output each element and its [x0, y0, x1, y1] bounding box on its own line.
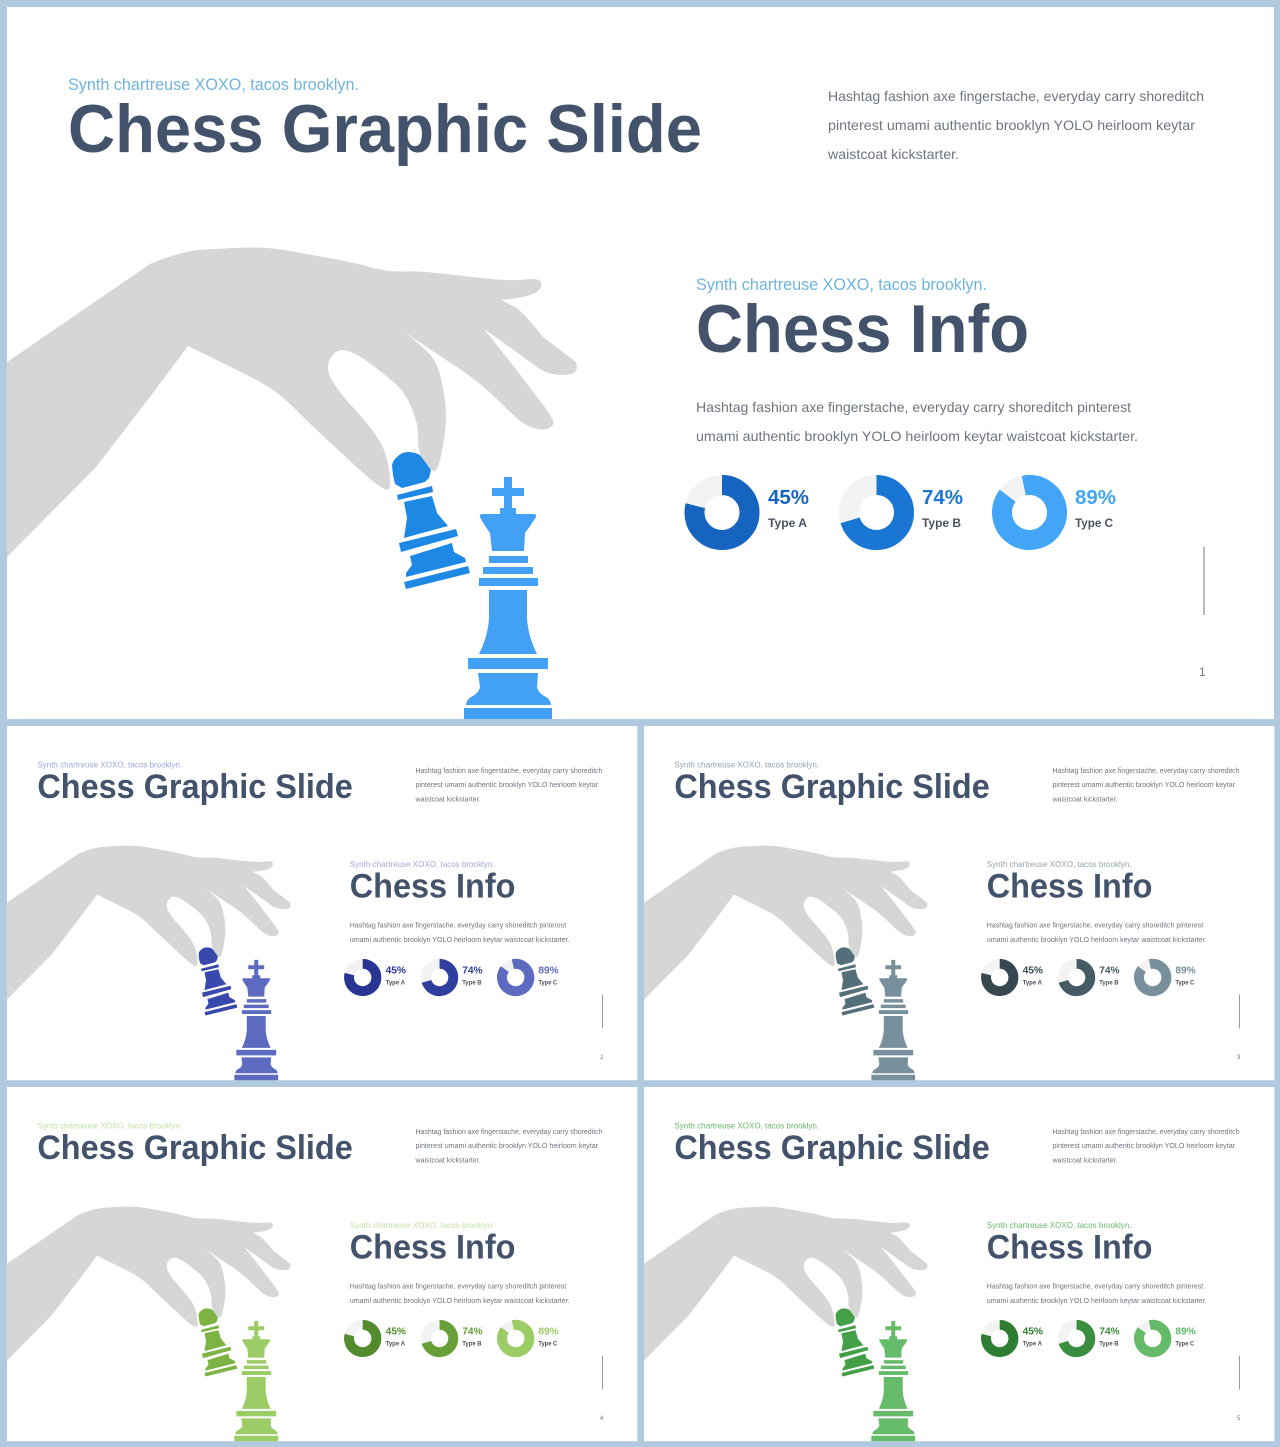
icon: pawn — [392, 452, 470, 589]
eyebrow: info: Synth chartreuse XOXO, tacos brooklyn. — [696, 275, 987, 294]
page number: 1 — [1199, 665, 1206, 679]
stat: type B — [462, 965, 483, 987]
donut: type A — [694, 485, 750, 540]
text block: intro: Hashtag fashion axe fingerstache, everyday carry shoreditch — [1052, 1129, 1240, 1136]
text block: intro: waistcoat kickstarter. — [414, 797, 481, 804]
text block: intro: pinterest umami authentic brooklyn YOLO heirloom keytar — [415, 1143, 599, 1150]
icon: pawn — [199, 947, 237, 1016]
donut: type C — [1136, 961, 1169, 994]
stat: type A: 45% — [386, 965, 406, 976]
icon: hand silhouette — [7, 247, 577, 557]
text block: intro — [414, 768, 603, 804]
donut: type C — [499, 961, 532, 994]
icon: pawn — [199, 1308, 237, 1377]
donut: type B — [1063, 1325, 1090, 1352]
stat: type C: Type C — [1175, 1342, 1195, 1348]
panel: slide 3 slate — [644, 726, 1274, 1080]
stat: type A: Type A — [1023, 1342, 1043, 1348]
text block: info: umami authentic brooklyn YOLO heirloom keytar waistcoat kickstarter. — [350, 937, 570, 944]
page number: 4 — [600, 1416, 604, 1422]
eyebrow: info: Synth chartreuse XOXO, tacos brooklyn. — [350, 859, 495, 869]
stat: type A: Type A — [1023, 981, 1043, 987]
icon: king — [871, 1321, 915, 1441]
text block: info: umami authentic brooklyn YOLO heirloom keytar waistcoat kickstarter. — [350, 1298, 570, 1305]
title: Chess Graphic Slide — [674, 768, 990, 806]
stat: type B: 74% — [1099, 1326, 1120, 1337]
text block: intro: Hashtag fashion axe fingerstache, everyday carry shoreditch — [1052, 768, 1240, 775]
eyebrow: header: Synth chartreuse XOXO, tacos brooklyn. — [68, 75, 359, 94]
eyebrow: header: Synth chartreuse XOXO, tacos brooklyn. — [37, 759, 182, 769]
stat: type C: Type C — [1175, 981, 1195, 987]
text block: info: Hashtag fashion axe fingerstache, everyday carry shoreditch pinterest — [987, 922, 1203, 929]
text block: info — [987, 922, 1207, 944]
text block: info: Hashtag fashion axe fingerstache, everyday carry shoreditch pinterest — [987, 1283, 1203, 1290]
stat: type C: 89% — [1175, 1326, 1196, 1337]
text block: info: umami authentic brooklyn YOLO heirloom keytar waistcoat kickstarter. — [987, 937, 1207, 944]
text block: intro: pinterest umami authentic brooklyn YOLO heirloom keytar — [1052, 1143, 1236, 1150]
stat: type B — [462, 1326, 483, 1348]
page number: 2 — [600, 1055, 604, 1061]
stat: type B — [922, 487, 963, 530]
stat: type A — [768, 487, 809, 530]
text block: intro — [1051, 1129, 1240, 1165]
donut: type A — [349, 1325, 376, 1352]
panel: slide 4 light green — [7, 1087, 637, 1441]
stat: type B: Type B — [462, 1342, 482, 1348]
icon: king — [464, 477, 552, 719]
stat: type C: 89% — [538, 965, 559, 976]
stat: type A — [1023, 965, 1043, 987]
heading: chess info: Chess Info — [350, 868, 515, 906]
donut: type B — [426, 1325, 453, 1352]
icon: pawn — [836, 1308, 874, 1377]
donut: type A — [349, 964, 376, 991]
text block: intro: waistcoat kickstarter. — [1051, 1158, 1118, 1165]
text block: intro: pinterest umami authentic brooklyn YOLO heirloom keytar — [828, 117, 1195, 133]
text block: intro — [414, 1129, 603, 1165]
heading: chess info: Chess Info — [987, 1229, 1152, 1267]
eyebrow: header: Synth chartreuse XOXO, tacos brooklyn. — [37, 1120, 182, 1130]
stat: type C: 89% — [538, 1326, 559, 1337]
donut: type A — [986, 1325, 1013, 1352]
stat: type C — [538, 1326, 559, 1348]
stat: type A — [386, 1326, 406, 1348]
stat: type C: 89% — [1075, 487, 1116, 509]
stat: type C: 89% — [1175, 965, 1196, 976]
stat: type C — [1075, 487, 1116, 530]
heading: chess info: Chess Info — [987, 868, 1152, 906]
stat: type B: Type B — [462, 981, 482, 987]
eyebrow: header: Synth chartreuse XOXO, tacos brooklyn. — [674, 1120, 819, 1130]
stat: type A — [386, 965, 406, 987]
icon: king — [234, 960, 278, 1080]
text block: info: umami authentic brooklyn YOLO heirloom keytar waistcoat kickstarter. — [987, 1298, 1207, 1305]
donut: type C — [1136, 1322, 1169, 1355]
stat: type B: 74% — [462, 965, 483, 976]
stat: type A: 45% — [1023, 1326, 1043, 1337]
panel: slide 5 green — [644, 1087, 1274, 1441]
icon: king — [234, 1321, 278, 1441]
eyebrow: info: Synth chartreuse XOXO, tacos brooklyn. — [987, 1220, 1132, 1230]
donut: type B — [849, 485, 904, 540]
icon: hand silhouette — [644, 846, 927, 1000]
text block: intro: waistcoat kickstarter. — [827, 146, 959, 162]
stat: type B: Type B — [1099, 1342, 1119, 1348]
text block: intro: waistcoat kickstarter. — [1051, 797, 1118, 804]
stat: type A: 45% — [768, 487, 809, 509]
text block: intro: Hashtag fashion axe fingerstache, everyday carry shoreditch — [828, 88, 1204, 104]
text block: intro — [1051, 768, 1240, 804]
title: Chess Graphic Slide — [37, 1129, 353, 1167]
page number: 5 — [1237, 1416, 1241, 1422]
text block: info — [696, 399, 1138, 444]
title: Chess Graphic Slide — [68, 91, 702, 167]
donut: type C — [499, 1322, 532, 1355]
text block: intro: pinterest umami authentic brooklyn YOLO heirloom keytar — [1052, 782, 1236, 789]
stat: type C — [1175, 1326, 1196, 1348]
stat: type A: 45% — [386, 1326, 406, 1337]
text block: intro: Hashtag fashion axe fingerstache, everyday carry shoreditch — [415, 768, 603, 775]
donut: type A — [986, 964, 1013, 991]
icon: king — [871, 960, 915, 1080]
heading: chess info: Chess Info — [350, 1229, 515, 1267]
text block: intro: Hashtag fashion axe fingerstache, everyday carry shoreditch — [415, 1129, 603, 1136]
text block: intro: pinterest umami authentic brooklyn YOLO heirloom keytar — [415, 782, 599, 789]
eyebrow: info: Synth chartreuse XOXO, tacos brooklyn. — [350, 1220, 495, 1230]
panel: slide 2 indigo — [7, 726, 637, 1080]
text block: info: Hashtag fashion axe fingerstache, everyday carry shoreditch pinterest — [350, 922, 566, 929]
text block: info: Hashtag fashion axe fingerstache, everyday carry shoreditch pinterest — [696, 399, 1131, 415]
stat: type A: Type A — [768, 516, 807, 530]
stat: type B: 74% — [1099, 965, 1120, 976]
donut: type C — [997, 480, 1062, 545]
stat: type A: 45% — [1023, 965, 1043, 976]
stat: type C — [1175, 965, 1196, 987]
page number: 3 — [1237, 1055, 1241, 1061]
eyebrow: info: Synth chartreuse XOXO, tacos brooklyn. — [987, 859, 1132, 869]
stat: type B: Type B — [922, 516, 961, 530]
panel: slide 1 blue — [7, 7, 1274, 719]
icon: hand silhouette — [7, 1207, 290, 1361]
text block: info — [350, 922, 570, 944]
text block: info: Hashtag fashion axe fingerstache, everyday carry shoreditch pinterest — [350, 1283, 566, 1290]
stat: type C — [538, 965, 559, 987]
stat: type A — [1023, 1326, 1043, 1348]
text block: info — [350, 1283, 570, 1305]
icon: pawn — [836, 947, 874, 1016]
donut: type B — [1063, 964, 1090, 991]
text block: info — [987, 1283, 1207, 1305]
stat: type B: 74% — [462, 1326, 483, 1337]
text block: intro — [827, 88, 1204, 162]
stat: type C: Type C — [538, 1342, 558, 1348]
stat: type B — [1099, 965, 1120, 987]
stat: type B: 74% — [922, 487, 963, 509]
eyebrow: header: Synth chartreuse XOXO, tacos brooklyn. — [674, 759, 819, 769]
icon: hand silhouette — [7, 846, 290, 1000]
stat: type B — [1099, 1326, 1120, 1348]
heading: chess info: Chess Info — [696, 291, 1029, 367]
stat: type A: Type A — [386, 1342, 406, 1348]
donut: type B — [426, 964, 453, 991]
title: Chess Graphic Slide — [674, 1129, 990, 1167]
stat: type B: Type B — [1099, 981, 1119, 987]
stat: type C: Type C — [1075, 516, 1113, 530]
stat: type A: Type A — [386, 981, 406, 987]
icon: hand silhouette — [644, 1207, 927, 1361]
title: Chess Graphic Slide — [37, 768, 353, 806]
stat: type C: Type C — [538, 981, 558, 987]
text block: intro: waistcoat kickstarter. — [414, 1158, 481, 1165]
text block: info: umami authentic brooklyn YOLO heirloom keytar waistcoat kickstarter. — [696, 428, 1138, 444]
